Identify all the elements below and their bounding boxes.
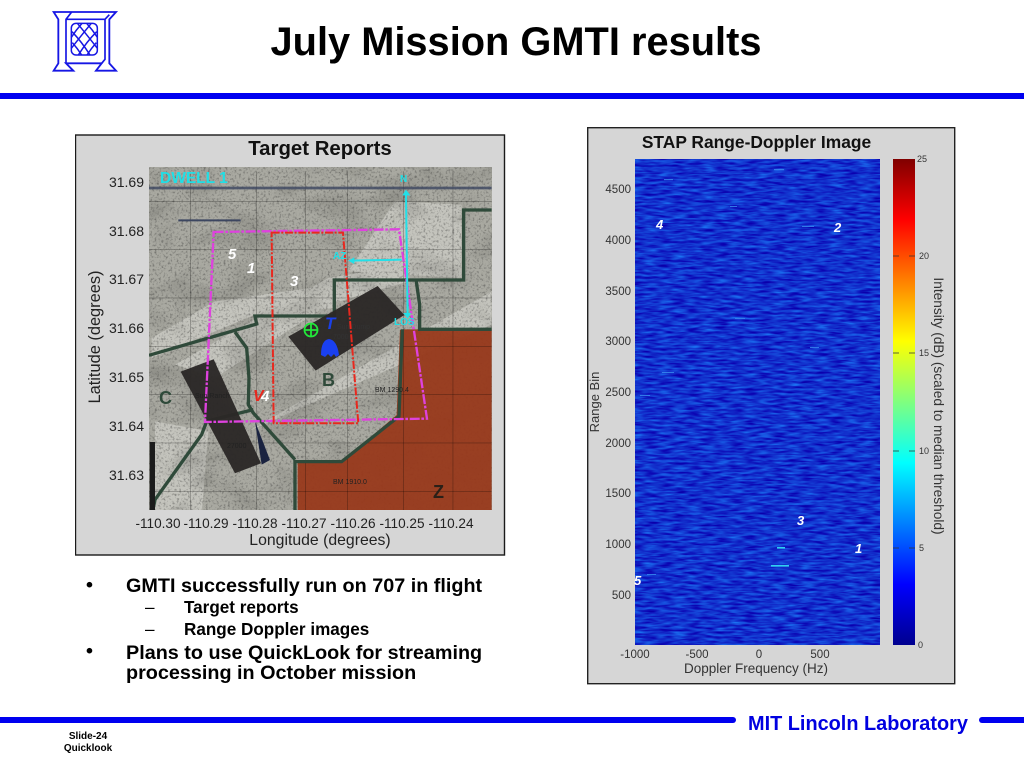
map annotation labels: AZ xyxy=(333,251,346,262)
icon: blue target marker xyxy=(321,339,339,357)
sub-bullet: target reports xyxy=(145,598,299,617)
colorbar: 20 xyxy=(919,251,929,261)
map heading: Target Reports xyxy=(248,138,392,160)
panel: target reports map xyxy=(75,134,506,556)
colorbar: 10 xyxy=(919,446,929,456)
sub-bullet: range doppler images: – xyxy=(145,620,155,639)
bullet 1: • xyxy=(86,574,93,596)
boundary lines xyxy=(149,210,492,516)
map annotation labels: 3 xyxy=(290,273,299,290)
bullet list: Target reports xyxy=(184,598,299,617)
x axis tick labels: -110.24 xyxy=(428,516,474,531)
bullet 2: • xyxy=(86,640,93,662)
x axis tick labels: -500 xyxy=(685,649,709,661)
header rule xyxy=(0,93,1024,99)
y axis title: Latitude (degrees) xyxy=(86,270,104,404)
bullet list: processing in October mission xyxy=(126,662,416,684)
bullet list: Range Doppler images xyxy=(184,620,369,639)
x axis tick labels: -110.30 xyxy=(135,516,181,531)
bright detections xyxy=(771,547,789,567)
map annotation labels xyxy=(160,170,415,405)
map annotation labels: 4 xyxy=(260,388,270,405)
y axis tick labels: 2000 xyxy=(605,438,631,450)
map image: B xyxy=(322,370,335,390)
bullet 1 xyxy=(86,574,482,597)
colorbar: 0 xyxy=(918,640,923,650)
y axis tick labels: 31.63 xyxy=(109,467,144,483)
map image: 27000 xyxy=(227,443,247,450)
y axis tick labels xyxy=(605,184,631,602)
dwell footprint: magenta xyxy=(205,229,427,422)
y axis tick labels: 31.69 xyxy=(109,174,144,190)
y axis tick labels: 31.67 xyxy=(109,271,144,287)
y axis tick labels: 500 xyxy=(612,590,631,602)
restricted zone xyxy=(298,329,492,516)
x axis tick labels: -110.28 xyxy=(232,516,278,531)
y axis tick labels: 2500 xyxy=(605,387,631,399)
colorbar: 25 xyxy=(917,154,927,164)
map annotation labels: LOS xyxy=(394,317,415,328)
target number labels: 5 xyxy=(634,573,642,588)
icon: green target marker xyxy=(304,323,318,337)
y axis tick labels: 31.66 xyxy=(109,320,144,336)
map annotation labels: DWELL 1 xyxy=(160,170,228,187)
y axis tick labels: 31.64 xyxy=(109,418,144,434)
colorbar: 5 xyxy=(919,543,924,553)
slide footer: Quicklook xyxy=(64,743,112,754)
y axis tick labels: 31.68 xyxy=(109,223,144,239)
image heading: STAP Range-Doppler Image xyxy=(642,132,871,152)
x axis tick labels xyxy=(620,649,830,661)
footer rule right xyxy=(979,717,1024,723)
map annotation labels: 5 xyxy=(228,246,237,263)
panel: STAP range-doppler image xyxy=(587,127,956,684)
x axis tick labels: -110.26 xyxy=(330,516,376,531)
x axis tick labels: 0 xyxy=(756,649,762,661)
map image: 7000 xyxy=(333,334,349,341)
map image: C xyxy=(159,388,172,408)
bullet list: Plans to use QuickLook for streaming xyxy=(126,642,482,664)
x axis tick labels: 500 xyxy=(810,649,830,661)
map image: Sun Ranch xyxy=(195,393,230,400)
dwell footprint: red xyxy=(272,233,358,423)
y axis tick labels: 4500 xyxy=(605,184,631,196)
y axis tick labels: 3000 xyxy=(605,336,631,348)
title: July Mission GMTI results xyxy=(271,20,761,64)
colorbar xyxy=(893,154,929,650)
x axis title: Longitude (degrees) xyxy=(249,532,391,549)
y axis tick labels: 1000 xyxy=(605,539,631,551)
colorbar title: Intensity (dB) (scaled to median threshold) xyxy=(931,277,946,535)
colorbar: 15 xyxy=(919,348,929,358)
map image: Sun Dump xyxy=(337,324,370,331)
y axis tick labels: 4000 xyxy=(605,235,631,247)
x axis tick labels: -110.29 xyxy=(183,516,229,531)
map image: BM 1290.4 xyxy=(375,387,409,394)
bullet list xyxy=(86,574,482,684)
slide footer: Slide-24 xyxy=(69,731,107,742)
target number labels xyxy=(634,217,862,588)
x axis tick labels: -1000 xyxy=(620,649,650,661)
y axis tick labels: 1500 xyxy=(605,488,631,500)
bullet 2 xyxy=(86,640,482,684)
logo: MIT Lincoln Laboratory xyxy=(52,11,118,72)
blocked zones xyxy=(288,286,404,371)
map annotation labels: 1 xyxy=(247,260,255,277)
x axis tick labels: -110.27 xyxy=(281,516,327,531)
map annotation labels: T xyxy=(325,314,337,333)
map annotation labels: N xyxy=(400,174,407,185)
footer lab name: MIT Lincoln Laboratory xyxy=(748,713,968,735)
y axis tick labels: 3500 xyxy=(605,286,631,298)
y axis tick labels xyxy=(109,174,144,483)
x axis tick labels: -110.25 xyxy=(379,516,425,531)
footer rule left xyxy=(0,717,736,723)
north and azimuth arrows xyxy=(348,190,411,319)
target number labels: 1 xyxy=(855,541,862,556)
x axis title: Doppler Frequency (Hz) xyxy=(684,661,828,676)
x axis tick labels xyxy=(135,516,474,531)
range-doppler heat map xyxy=(635,159,880,645)
y axis title: Range Bin xyxy=(587,372,602,432)
bullet list: GMTI successfully run on 707 in flight xyxy=(126,575,482,597)
map image: Z xyxy=(433,482,444,502)
map image: BM 1910.0 xyxy=(333,479,367,486)
target number labels: 2 xyxy=(833,220,842,235)
y axis tick labels: 31.65 xyxy=(109,369,144,385)
target number labels: 4 xyxy=(655,217,664,232)
sub-bullet: range doppler images xyxy=(145,620,369,639)
map image xyxy=(149,167,492,516)
sub-bullet: target reports: – xyxy=(145,598,155,617)
map annotation labels: V xyxy=(253,388,265,405)
slide footer xyxy=(64,731,112,754)
target number labels: 3 xyxy=(797,513,805,528)
